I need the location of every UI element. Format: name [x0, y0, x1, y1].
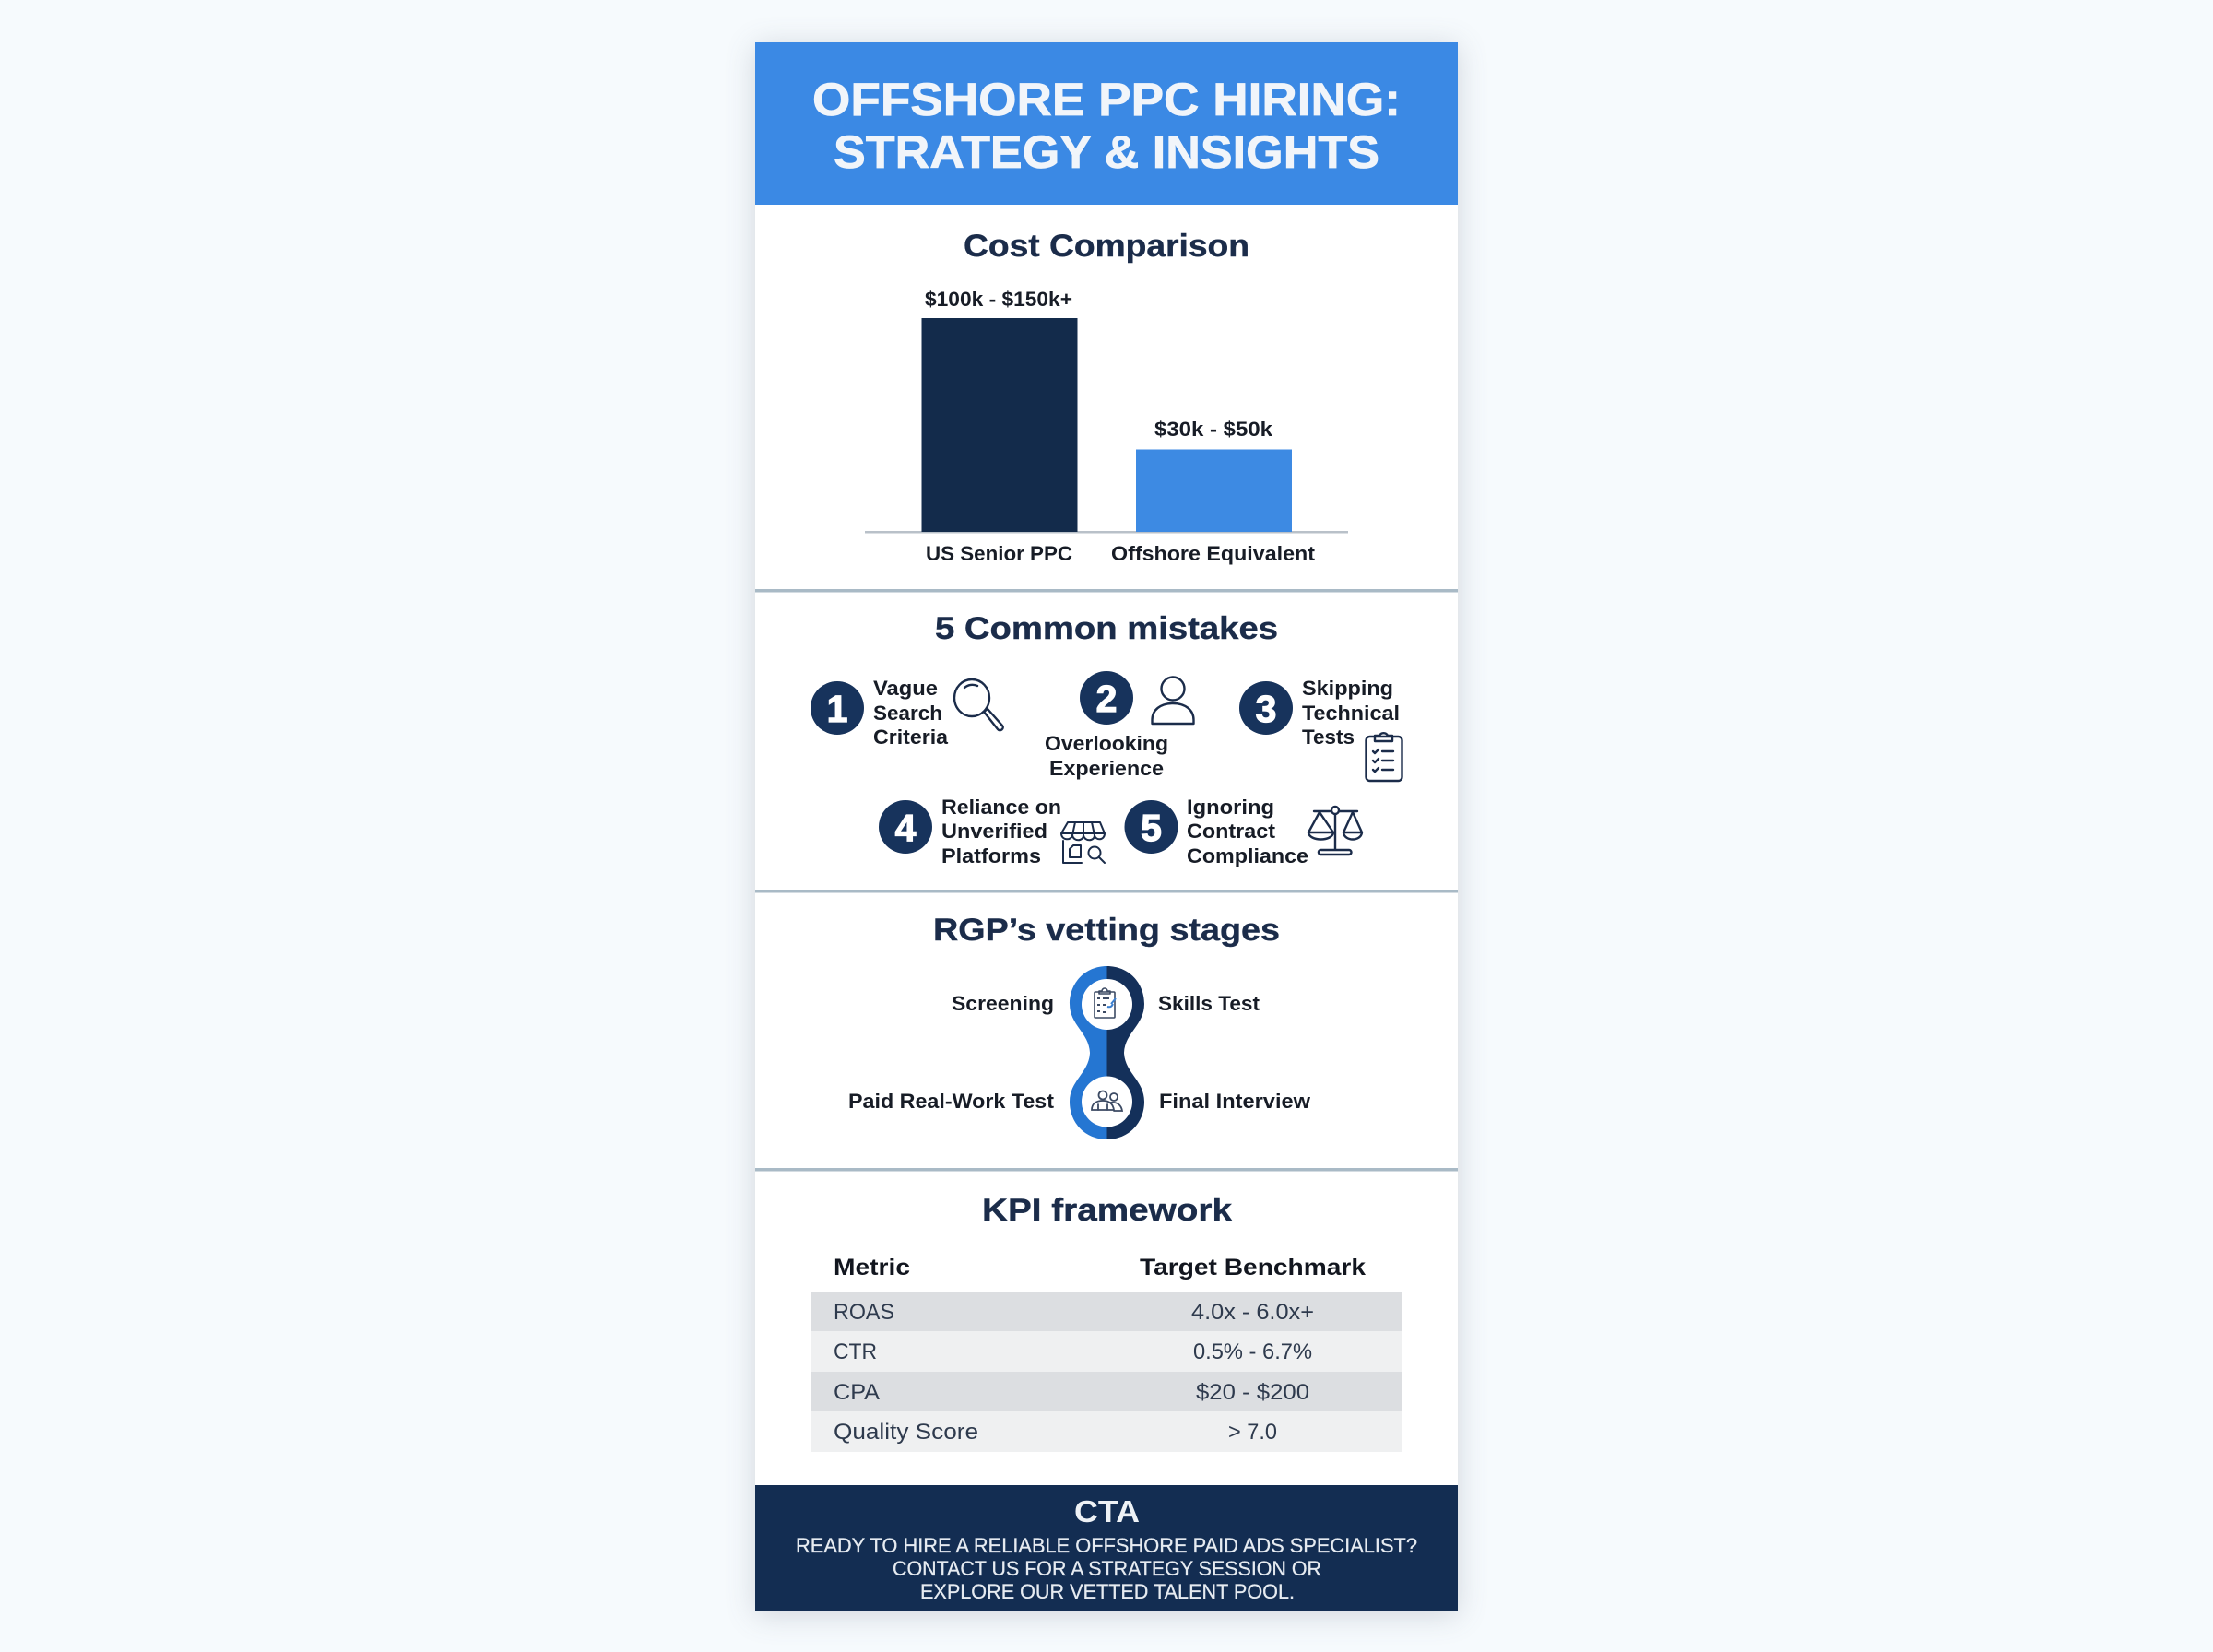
- icon: clipboard: [1095, 988, 1116, 1018]
- KPI table: [811, 1255, 1402, 1452]
- bar chart: $30k - $50k: [1154, 418, 1273, 441]
- icon: people: [1092, 1092, 1122, 1111]
- mistake 4: Platforms: [941, 844, 1041, 867]
- bar chart: [865, 288, 1348, 565]
- row: ROAS: [811, 1292, 1402, 1331]
- card background: [755, 42, 1458, 1611]
- mistake 2: Overlooking: [1045, 732, 1168, 755]
- mistake 4: Unverified: [941, 820, 1047, 843]
- heading: vetting stages: RGP’s vetting stages: [933, 913, 1280, 948]
- mistake 5: Ignoring: [1187, 796, 1274, 819]
- title: OFFSHORE PPC HIRING:: [812, 74, 1401, 125]
- row: CTR: [811, 1331, 1402, 1372]
- mistake 3: Skipping: [1302, 677, 1393, 700]
- row: quality score: [811, 1411, 1402, 1452]
- CTA body text: [796, 1534, 1417, 1603]
- bar chart: $100k - $150k+: [925, 288, 1072, 311]
- mistake 4: 4: [895, 807, 917, 849]
- row: CTR: 0.5% - 6.7%: [1193, 1339, 1312, 1364]
- row: quality score: Quality Score: [834, 1420, 978, 1445]
- CTA body text: CONTACT US FOR A STRATEGY SESSION OR: [893, 1557, 1321, 1580]
- icon: scales: [1308, 807, 1362, 855]
- mistake 4: [879, 796, 1105, 867]
- icon: storefront: [1061, 822, 1105, 863]
- row: CPA: CPA: [834, 1380, 880, 1405]
- header banner: [755, 42, 1458, 205]
- panel: vetting stages: [848, 913, 1311, 1139]
- mistake 3: [1239, 677, 1402, 781]
- panel: KPI framework: [811, 1193, 1402, 1452]
- stage label: skills test: Skills Test: [1158, 992, 1260, 1015]
- heading: 5 common mistakes: 5 Common mistakes: [935, 611, 1278, 646]
- CTA heading: CTA: [1074, 1494, 1140, 1528]
- mistake 1: [811, 677, 1003, 749]
- mistake 1: Vague: [873, 677, 938, 700]
- title: STRATEGY & INSIGHTS: [834, 126, 1379, 178]
- table header: [834, 1255, 1366, 1280]
- mistake 3: Tests: [1302, 726, 1355, 749]
- mistake 5: 5: [1141, 807, 1162, 849]
- row: CTR: CTR: [834, 1339, 877, 1364]
- icon: person: [1153, 677, 1193, 724]
- stage label: screening: Screening: [952, 992, 1054, 1015]
- mistake 2: [1045, 671, 1193, 780]
- mistake 1: 1: [827, 688, 847, 730]
- mistake 4: Reliance on: [941, 796, 1061, 819]
- connector: figure eight: [1070, 966, 1144, 1139]
- row: quality score: > 7.0: [1228, 1420, 1277, 1445]
- row: ROAS: 4.0x - 6.0x+: [1191, 1300, 1314, 1325]
- heading: cost comparison: Cost Comparison: [964, 229, 1249, 264]
- mistake 2: Experience: [1049, 757, 1164, 780]
- mistake 5: Compliance: [1187, 844, 1308, 867]
- table header: Target Benchmark: [1140, 1255, 1366, 1280]
- bar chart: Offshore Equivalent: [1111, 542, 1316, 565]
- mistake 5: Contract: [1187, 820, 1276, 843]
- row: CPA: [811, 1372, 1402, 1411]
- CTA body text: EXPLORE OUR VETTED TALENT POOL.: [920, 1580, 1295, 1603]
- table header: Metric: [834, 1255, 910, 1280]
- icon: clipboard: [1367, 733, 1402, 781]
- mistake 3: 3: [1256, 688, 1276, 730]
- panel: cost comparison: [865, 229, 1348, 565]
- panel: 5 common mistakes: [811, 611, 1402, 867]
- mistake 1: Search: [873, 702, 942, 725]
- CTA body text: READY TO HIRE A RELIABLE OFFSHORE PAID ADS SPECIALIST?: [796, 1534, 1417, 1557]
- stage label: paid real-work test: Paid Real-Work Test: [848, 1090, 1055, 1113]
- mistake 3: Technical: [1302, 702, 1400, 725]
- CTA banner: [755, 1485, 1458, 1611]
- icon: magnifier: [954, 679, 1003, 730]
- mistake 1: Criteria: [873, 726, 948, 749]
- mistake 5: [1125, 796, 1362, 867]
- title: [812, 74, 1401, 178]
- stage label: final interview: Final Interview: [1159, 1090, 1311, 1113]
- heading: KPI framework: KPI framework: [982, 1193, 1232, 1228]
- row: CPA: $20 - $200: [1196, 1380, 1309, 1405]
- row: ROAS: ROAS: [834, 1300, 894, 1325]
- bar chart: US Senior PPC: [926, 542, 1072, 565]
- mistake 2: 2: [1096, 678, 1117, 720]
